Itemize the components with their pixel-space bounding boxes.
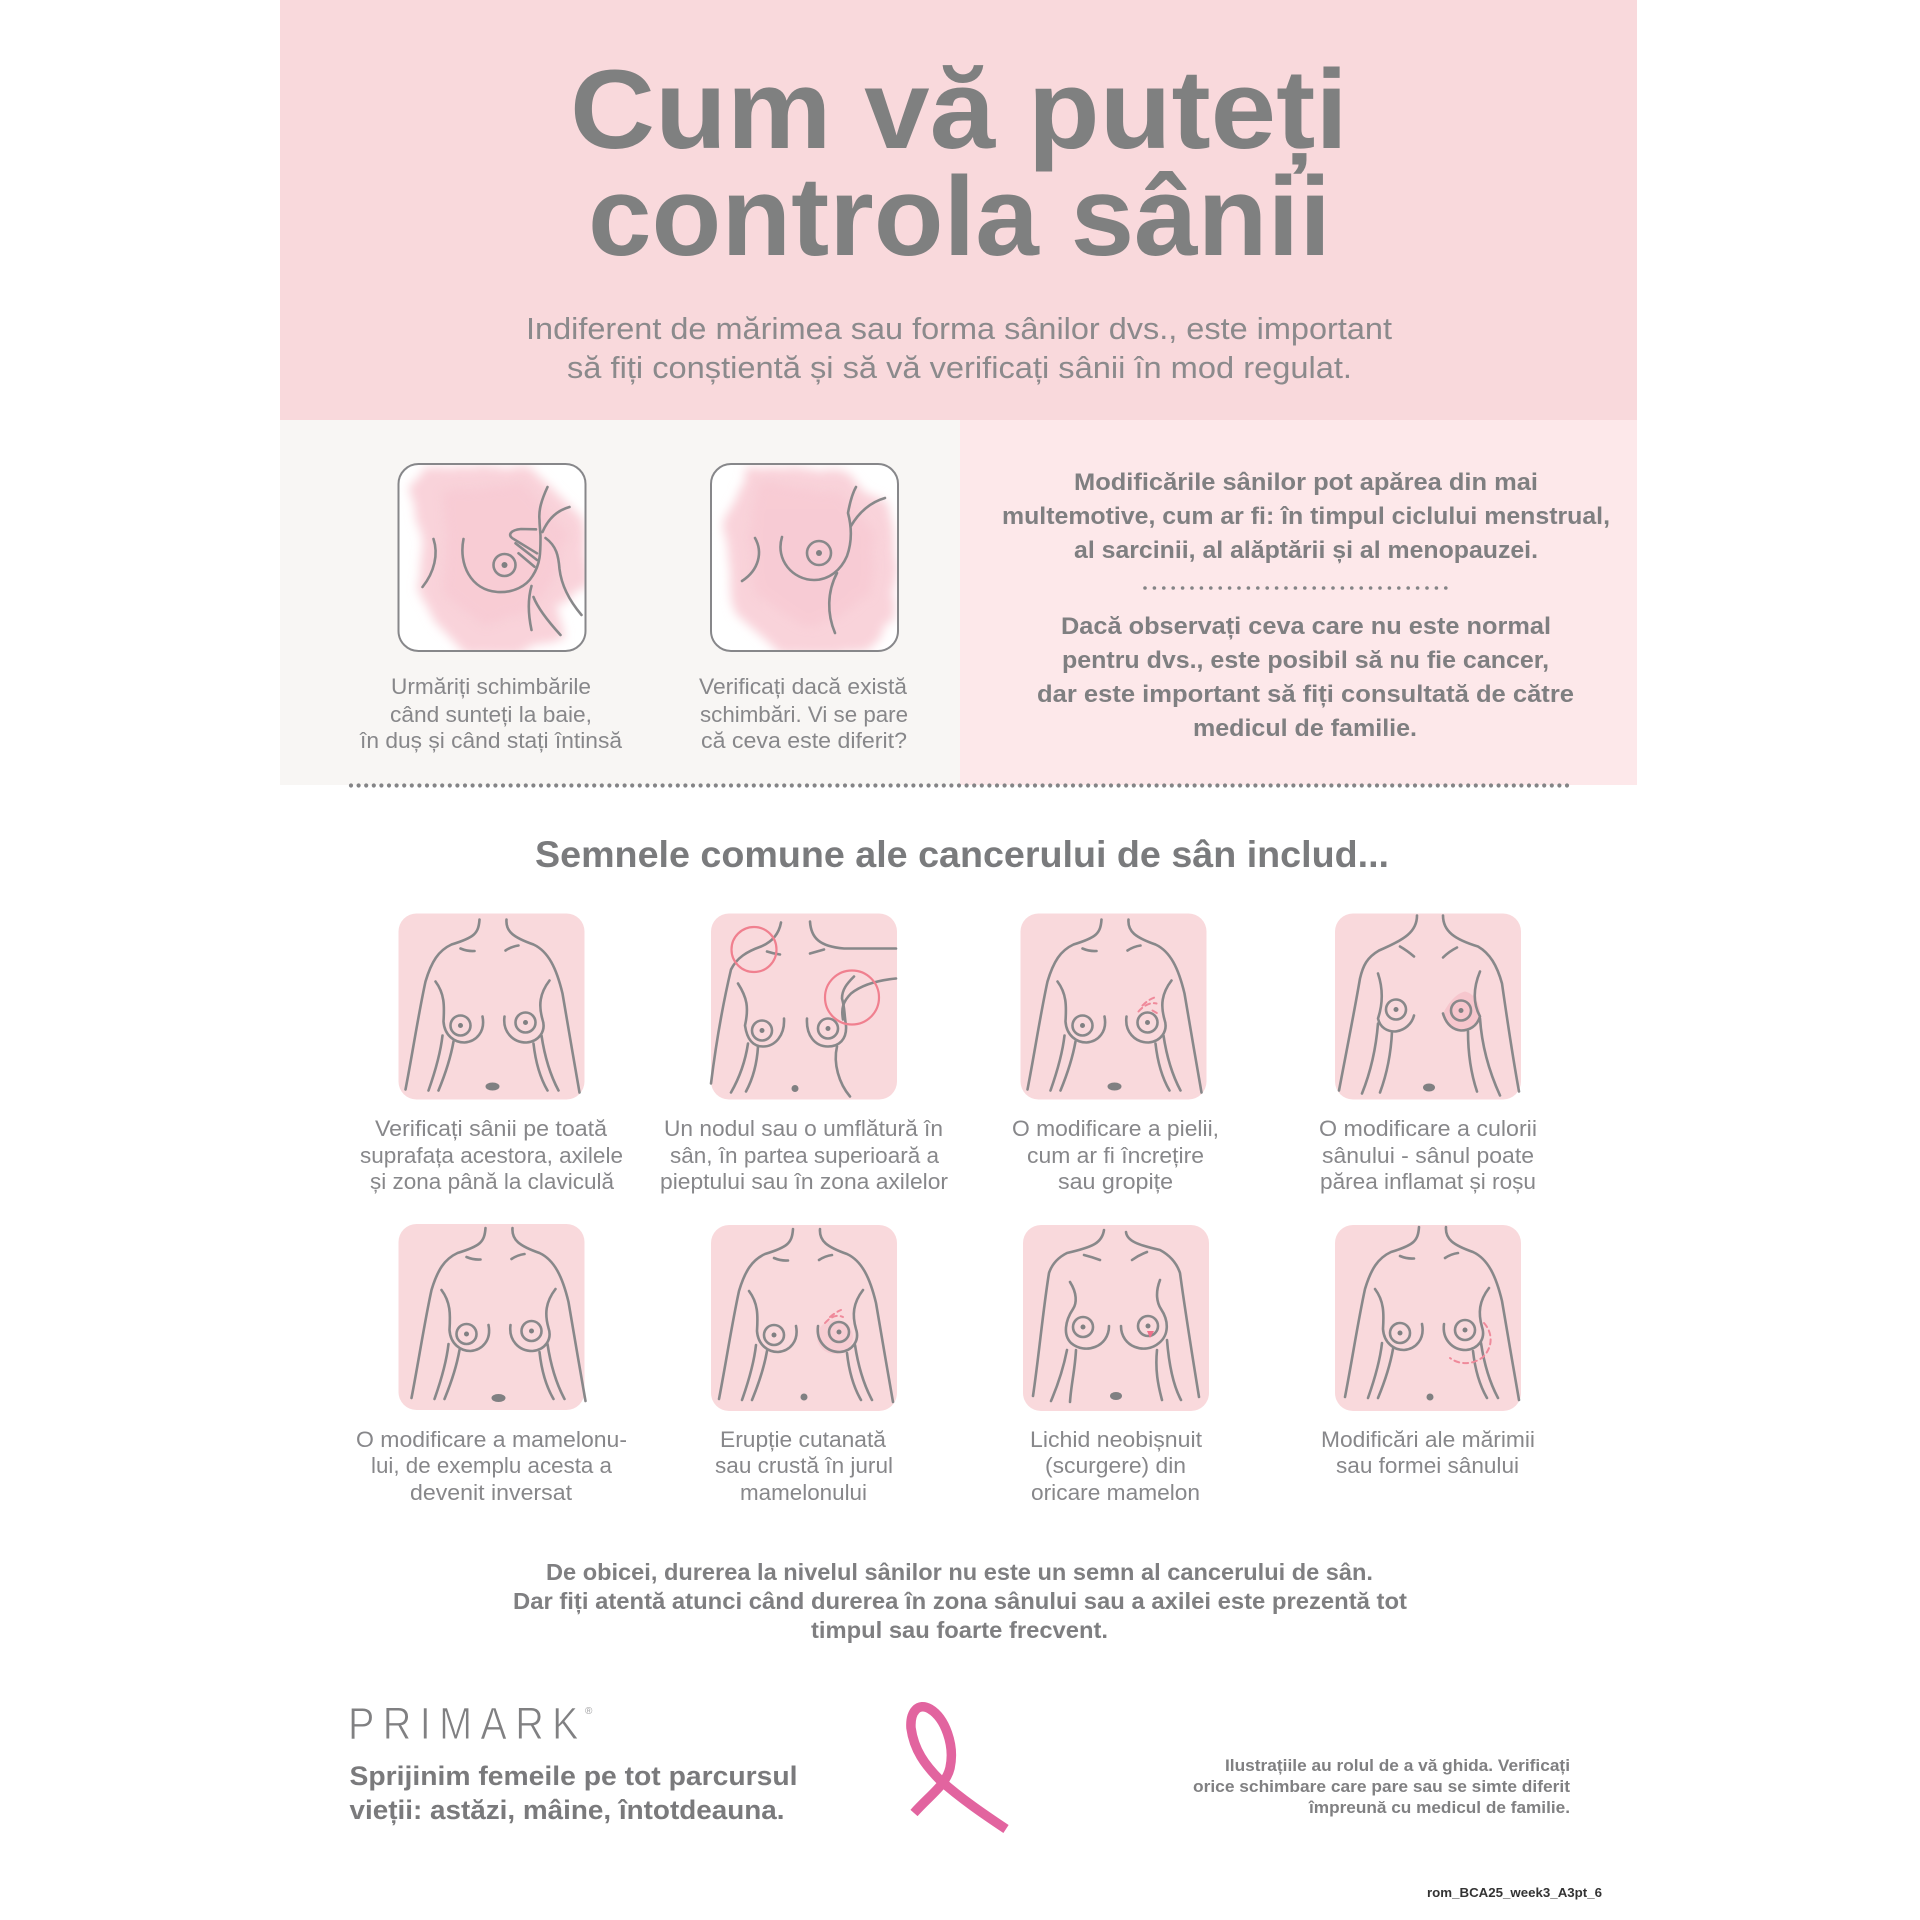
- information text: causes of changes: al sarcinii, al alăptării și al menopauzei.: [1074, 537, 1538, 564]
- sign 3 caption: O modificare a pielii,: [1012, 1116, 1219, 1141]
- title: Cum vă puteți: [570, 47, 1348, 175]
- title: [570, 47, 1348, 279]
- sign 1 caption: Verificați sânii pe toată: [375, 1116, 608, 1141]
- sign 2 caption: pieptului sau în zona axilelor: [660, 1169, 948, 1194]
- sign 8 caption: [1321, 1427, 1535, 1478]
- slogan: [350, 1761, 798, 1825]
- disclaimer: împreună cu medicul de familie.: [1308, 1799, 1570, 1817]
- information text: causes of changes: [1002, 469, 1610, 564]
- step caption 2: schimbări. Vi se pare: [700, 702, 908, 727]
- pain note: timpul sau foarte frecvent.: [811, 1617, 1108, 1643]
- sign 8 caption: Modificări ale mărimii: [1321, 1427, 1535, 1452]
- information panel: [960, 420, 1637, 785]
- sign 4 caption: părea inflamat și roșu: [1320, 1169, 1536, 1194]
- logo: PRIMARK: PRIMARK: [348, 1699, 579, 1749]
- pain note: De obicei, durerea la nivelul sânilor nu este un semn al cancerului de sân.: [546, 1559, 1373, 1585]
- step caption 1: [359, 674, 623, 753]
- information text: see your doctor: medicul de familie.: [1193, 715, 1417, 742]
- pain note: [513, 1559, 1407, 1643]
- sign 7 caption: (scurgere) din: [1045, 1453, 1186, 1478]
- step caption 2: că ceva este diferit?: [701, 728, 907, 753]
- sign 5 caption: devenit inversat: [410, 1480, 572, 1505]
- sign 5 illustration: [398, 1224, 586, 1410]
- sign 7 illustration: [1023, 1225, 1209, 1411]
- information text: see your doctor: [1037, 613, 1574, 742]
- slogan: Sprijinim femeile pe tot parcursul: [350, 1761, 798, 1791]
- section heading: Semnele comune ale cancerului de sân includ...: [535, 834, 1389, 875]
- sign 3 caption: sau gropițe: [1058, 1169, 1173, 1194]
- sign 6 caption: mamelonului: [740, 1480, 867, 1505]
- icon: pink ribbon: [911, 1707, 1006, 1829]
- slogan: vieții: astăzi, mâine, întotdeauna.: [350, 1795, 784, 1825]
- sign 1 illustration: [398, 914, 584, 1100]
- sign 3 caption: [1012, 1116, 1219, 1194]
- subtitle: [526, 311, 1392, 385]
- information text: causes of changes: multemotive, cum ar fi: în timpul ciclului menstrual,: [1002, 503, 1610, 530]
- step caption 1: în duș și când stați întinsă: [359, 728, 623, 753]
- sign 1 caption: [360, 1116, 623, 1194]
- sign 4 caption: O modificare a culorii: [1319, 1116, 1537, 1141]
- sign 6 caption: Erupție cutanată: [720, 1427, 887, 1452]
- sign 7 caption: [1030, 1427, 1202, 1505]
- sign 1 caption: suprafața acestora, axilele: [360, 1143, 623, 1168]
- sign 2 caption: [660, 1116, 948, 1194]
- sign 1 caption: și zona până la claviculă: [370, 1169, 615, 1194]
- sign 2 illustration: [711, 914, 897, 1100]
- sign 4 illustration: [1335, 914, 1521, 1100]
- sign 3 caption: cum ar fi încrețire: [1027, 1143, 1204, 1168]
- step caption 2: Verificați dacă există: [699, 674, 908, 699]
- sign 4 caption: [1319, 1116, 1537, 1194]
- sign 8 caption: sau formei sânului: [1336, 1453, 1519, 1478]
- sign 7 caption: Lichid neobișnuit: [1030, 1427, 1202, 1452]
- pain note: Dar fiți atentă atunci când durerea în zona sânului sau a axilei este prezentă tot: [513, 1588, 1407, 1615]
- sign 6 caption: [715, 1427, 893, 1505]
- subtitle: Indiferent de mărimea sau forma sânilor dvs., este important: [526, 311, 1392, 346]
- sign 6 illustration: [711, 1225, 897, 1411]
- sign 4 caption: sânului - sânul poate: [1322, 1143, 1534, 1168]
- information text: see your doctor: dar este important să fiți consultată de către: [1037, 681, 1574, 708]
- sign 7 caption: oricare mamelon: [1031, 1480, 1200, 1505]
- sign 5 caption: O modificare a mamelonu-: [356, 1427, 627, 1452]
- disclaimer: orice schimbare care pare sau se simte diferit: [1193, 1778, 1571, 1796]
- logo: PRIMARK: ®: [585, 1706, 593, 1717]
- header panel: [280, 0, 1637, 420]
- step caption 1: când sunteți la baie,: [390, 702, 592, 727]
- sign 8 illustration: [1335, 1225, 1521, 1411]
- sign 5 caption: [356, 1427, 627, 1505]
- document reference code: rom_BCA25_week3_A3pt_6: [1427, 1886, 1602, 1900]
- information text: see your doctor: Dacă observați ceva care nu este normal: [1061, 613, 1551, 640]
- information text: see your doctor: pentru dvs., este posibil să nu fie cancer,: [1062, 647, 1549, 674]
- sign 5 caption: lui, de exemplu acesta a: [371, 1453, 613, 1478]
- information text: causes of changes: Modificările sânilor pot apărea din mai: [1074, 469, 1538, 496]
- disclaimer: [1193, 1757, 1571, 1817]
- steps panel: [280, 420, 960, 785]
- step caption 2: [699, 674, 908, 753]
- title: controla sânii: [588, 154, 1331, 279]
- subtitle: să fiți conștientă și să vă verificați sânii în mod regulat.: [567, 350, 1352, 385]
- disclaimer: Ilustrațiile au rolul de a vă ghida. Verificați: [1225, 1757, 1570, 1775]
- sign 6 caption: sau crustă în jurul: [715, 1453, 893, 1478]
- step caption 1: Urmăriți schimbările: [391, 674, 591, 699]
- sign 3 illustration: [1020, 914, 1206, 1100]
- step card: looking for changes: [711, 464, 898, 654]
- sign 2 caption: sân, în partea superioară a: [670, 1143, 940, 1168]
- step card: self-check with hand: [398, 464, 588, 654]
- sign 2 caption: Un nodul sau o umflătură în: [664, 1116, 943, 1141]
